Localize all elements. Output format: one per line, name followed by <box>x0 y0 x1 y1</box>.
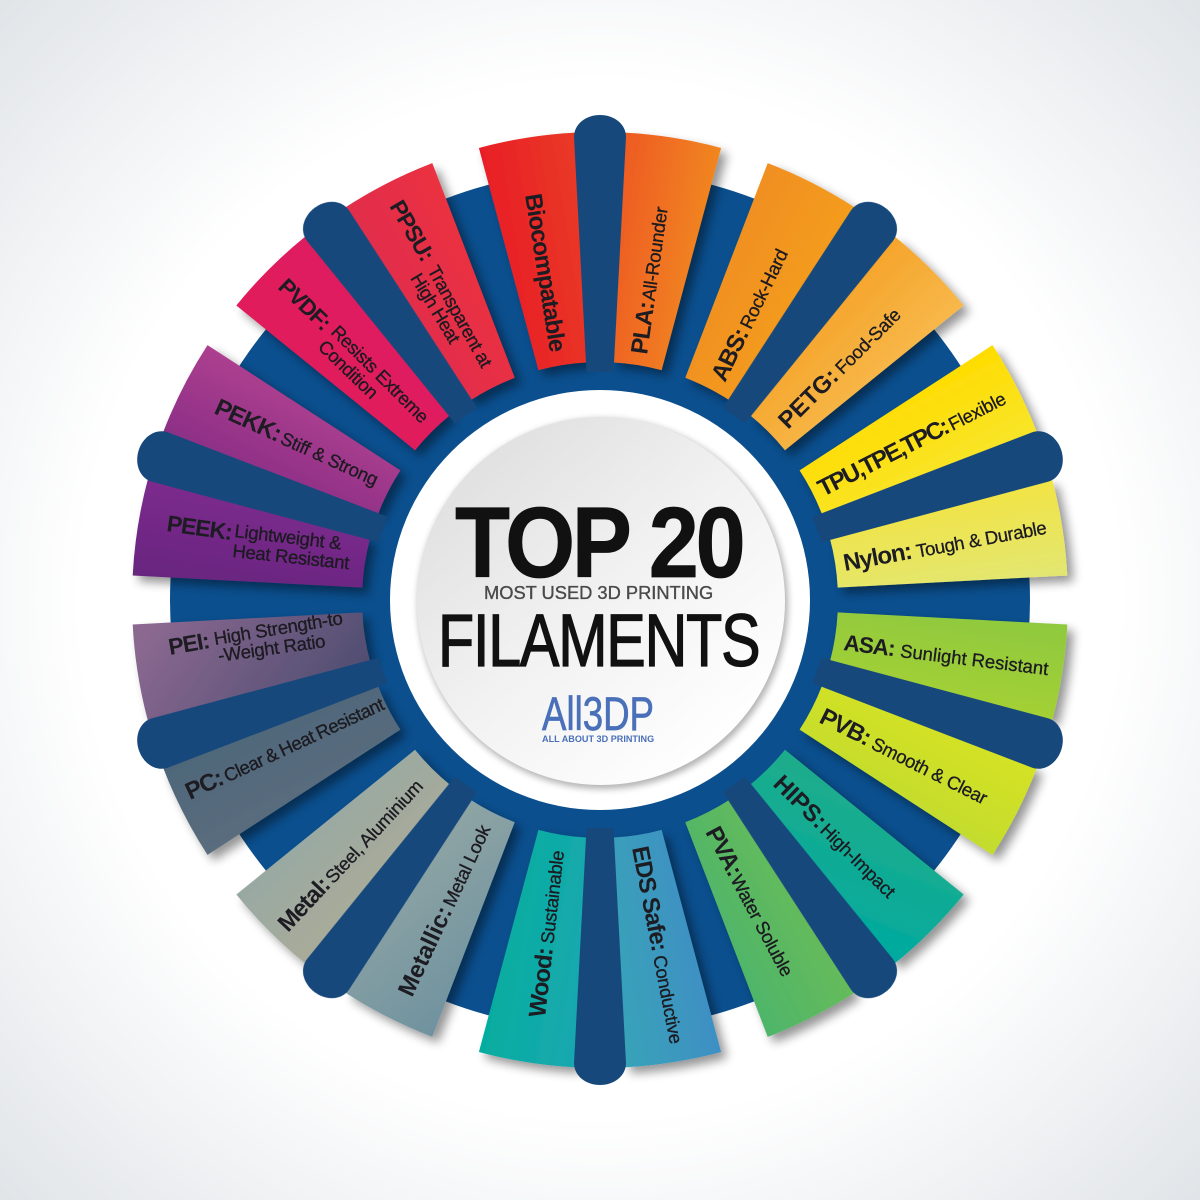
title: TOP 20: TOP 20 <box>455 488 742 599</box>
segment: PVDF <box>235 235 467 467</box>
segment: Wood <box>478 826 611 1070</box>
segment: PPSU: Transparent at <box>424 262 497 371</box>
segment: Nylon <box>826 478 1070 611</box>
segment: ABS: ABS:Rock-Hard <box>706 244 794 386</box>
segment: Biocompatable <box>478 130 611 374</box>
segment: PEEK: Heat Resistant <box>232 540 350 573</box>
segment: Wood: Wood:Sustainable <box>524 849 570 1019</box>
subtitle: MOST USED 3D PRINTING <box>484 582 713 603</box>
segment: PVDF: Resists Extreme <box>327 321 433 427</box>
filament segments <box>130 130 1070 1070</box>
segment: EDS Safe <box>589 826 722 1070</box>
segment: PEEK <box>130 478 374 611</box>
segment: PEKK <box>161 344 411 536</box>
segment: PPSU: High Heat <box>407 269 465 347</box>
segment: EDS Safe: EDS Safe: Conductive <box>626 844 691 1046</box>
segment: PVA <box>664 789 856 1039</box>
logo: All3DP: All3DP <box>542 688 654 740</box>
segment: PEEK: PEEK: <box>165 510 234 545</box>
segment: ABS <box>664 161 856 411</box>
centre disc shadow <box>418 419 788 789</box>
segment: PVDF: Condition <box>314 336 383 403</box>
blue rounded tabs <box>131 115 1069 1085</box>
segment: PVDF: PVDF: <box>274 274 336 335</box>
segment: PEI: PEI: <box>166 627 211 660</box>
white centre ring <box>390 390 810 810</box>
segment: Nylon: Nylon:Tough & Durable <box>841 513 1048 577</box>
segment: TPU, TPE, TPC <box>789 344 1039 536</box>
segment: PEI: -Weight Ratio <box>217 630 326 666</box>
segment: PVB: PVB:Smooth & Clear <box>815 703 993 810</box>
segment: ASA <box>826 589 1070 722</box>
segment: HIPS: HIPS:High-Impact <box>768 770 903 903</box>
blue wheel disc <box>170 170 1030 1030</box>
title: FILAMENTS: FILAMENTS <box>438 600 759 683</box>
segment: PPSU <box>344 161 536 411</box>
segment: PEI <box>130 589 374 722</box>
segment: PEI: High Strength-to <box>212 607 344 649</box>
segment: Biocompatable: Biocompatable <box>519 192 571 354</box>
segment: HIPS <box>733 733 965 965</box>
logo tagline: ALL ABOUT 3D PRINTING <box>542 734 654 744</box>
segment: Metal <box>235 733 467 965</box>
segment: Metallic: Metallic:Metal Look <box>393 819 497 1001</box>
segment: PVA: PVA:Water Soluble <box>700 822 801 981</box>
segment: PLA <box>589 130 722 374</box>
segment: PEEK: Lightweight & <box>234 520 343 554</box>
centre disc <box>417 417 785 785</box>
segment: TPU, TPE, TPC: TPU,TPE,TPC:Flexible <box>813 384 1010 502</box>
segment: Metal: Metal:Steel, Aluminium <box>273 773 428 937</box>
segment: PC: PC:Clear & Heat Resistant <box>181 690 388 805</box>
segment: PETG <box>733 235 965 467</box>
segment: PLA: PLA:All-Rounder <box>626 205 674 356</box>
segment: PC <box>161 664 411 856</box>
segment: Metallic <box>344 789 536 1039</box>
segment: PETG: PETG:Food-Safe <box>773 301 906 434</box>
segment: PVB <box>789 664 1039 856</box>
segment: PEKK: PEKK:Stiff & Strong <box>211 394 383 492</box>
segment: PPSU: PPSU: <box>385 196 440 265</box>
segment: ASA: ASA:Sunlight Resistant <box>842 630 1050 680</box>
